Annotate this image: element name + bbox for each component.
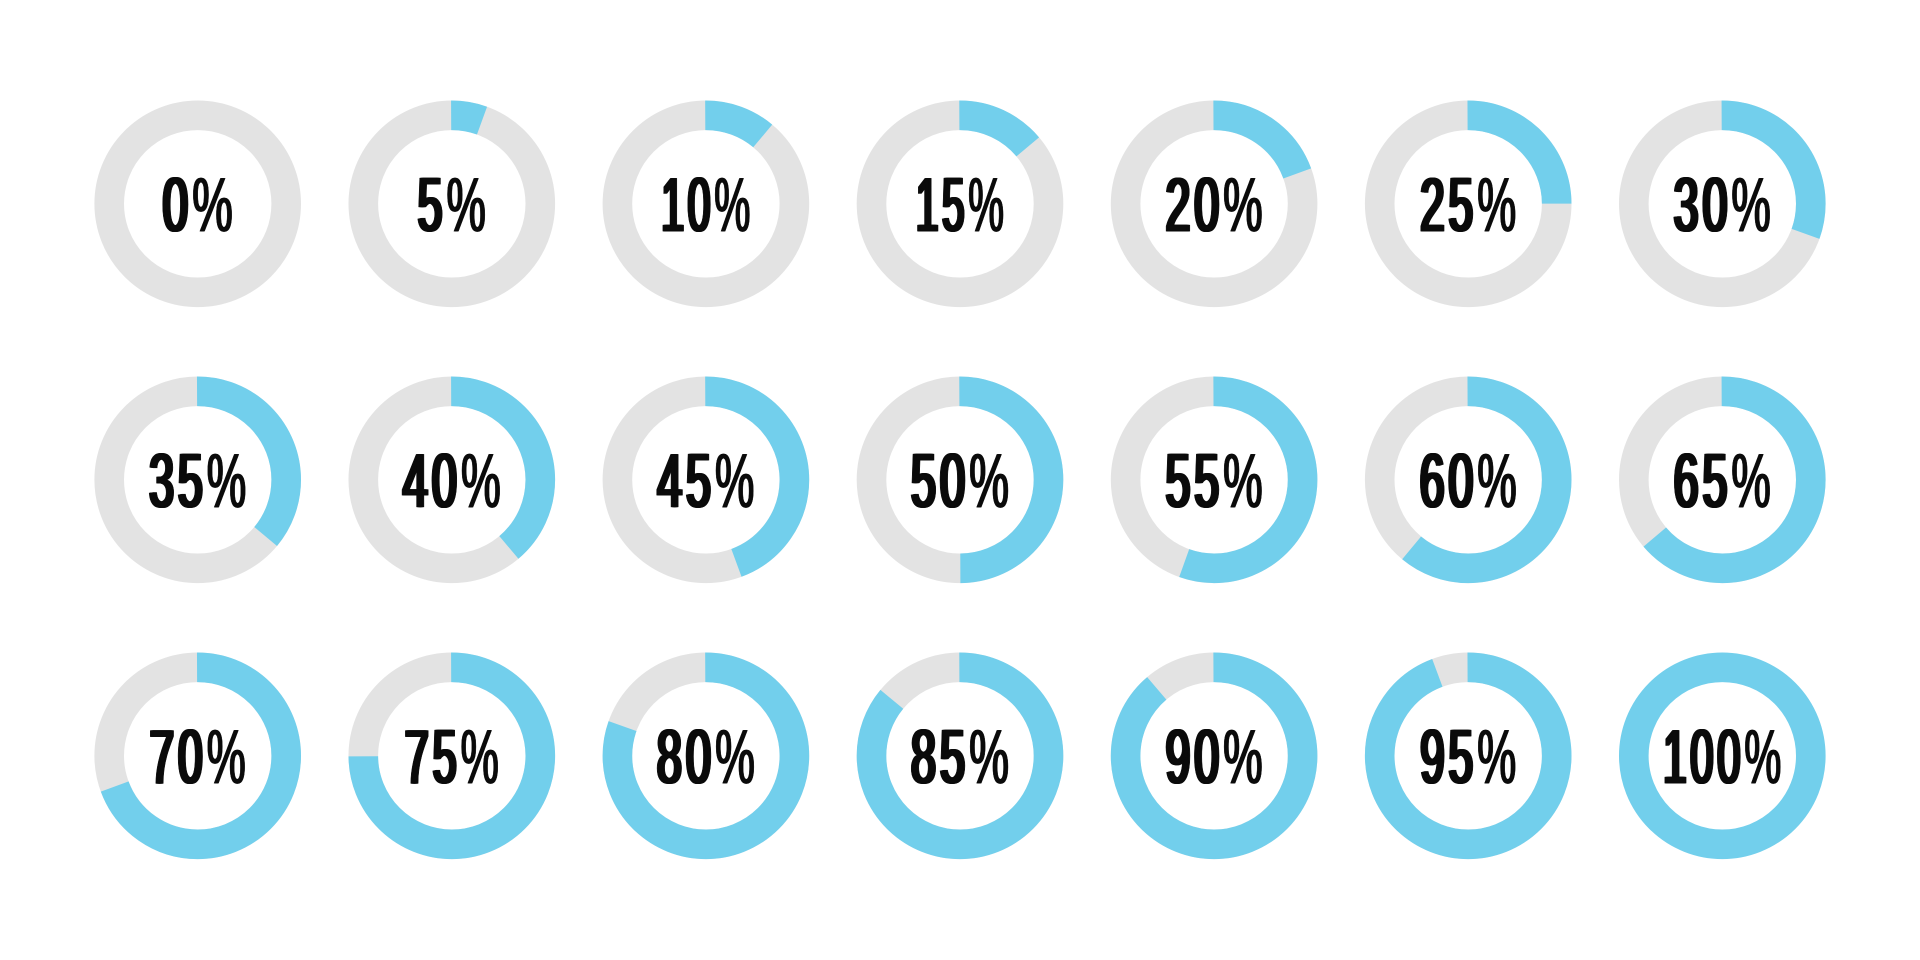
donut: 80%: 80% [657,715,755,800]
donut: 95%: 95% [1420,715,1516,800]
donut: 35% [109,391,286,568]
donut: 30%: 30% [1674,163,1771,248]
donut: 65%: 65% [1674,439,1771,524]
donut: 5%: 5% [418,163,486,248]
donut: 25%: 25% [1420,163,1516,248]
donut: 20%: 20% [1166,163,1263,248]
donut: 15%: 15% [916,163,1004,248]
donut: 5% [363,115,540,292]
donut: 90%: 90% [1166,715,1263,800]
donut: 75% [363,667,540,844]
donut: 55%: 55% [1166,439,1263,524]
donut: 35%: 35% [149,439,246,524]
donut: 0%: 0% [163,163,233,248]
donut: 70% [109,667,286,844]
donut: 70%: 70% [150,715,246,800]
donut: 30% [1634,115,1811,292]
donut: 40%: 40% [403,439,501,524]
donut: 20% [1126,115,1303,292]
donut: 65% [1634,391,1811,568]
donut: 15% [872,115,1048,292]
donut: 10%: 10% [661,163,750,248]
donut: 50% [872,391,1048,568]
donut: 40% [363,391,540,568]
donut: 25% [1380,115,1557,292]
donut: 75%: 75% [405,715,499,800]
donut: 50%: 50% [911,439,1009,524]
donut: 95% [1380,667,1557,844]
donut: 0% [109,115,286,292]
donut: 90% [1126,667,1303,844]
donut: 55% [1126,391,1303,568]
donut: 60% [1380,391,1557,568]
donut: 45%: 45% [657,439,754,524]
donut: 80% [617,667,794,844]
donut: 100% [1634,667,1811,844]
donut: 100%: 100% [1663,715,1781,800]
donut: 60%: 60% [1420,439,1517,524]
donut: 45% [617,391,794,568]
donut: 85% [872,667,1048,844]
donut: 10% [617,115,794,292]
donut: 85%: 85% [911,715,1009,800]
